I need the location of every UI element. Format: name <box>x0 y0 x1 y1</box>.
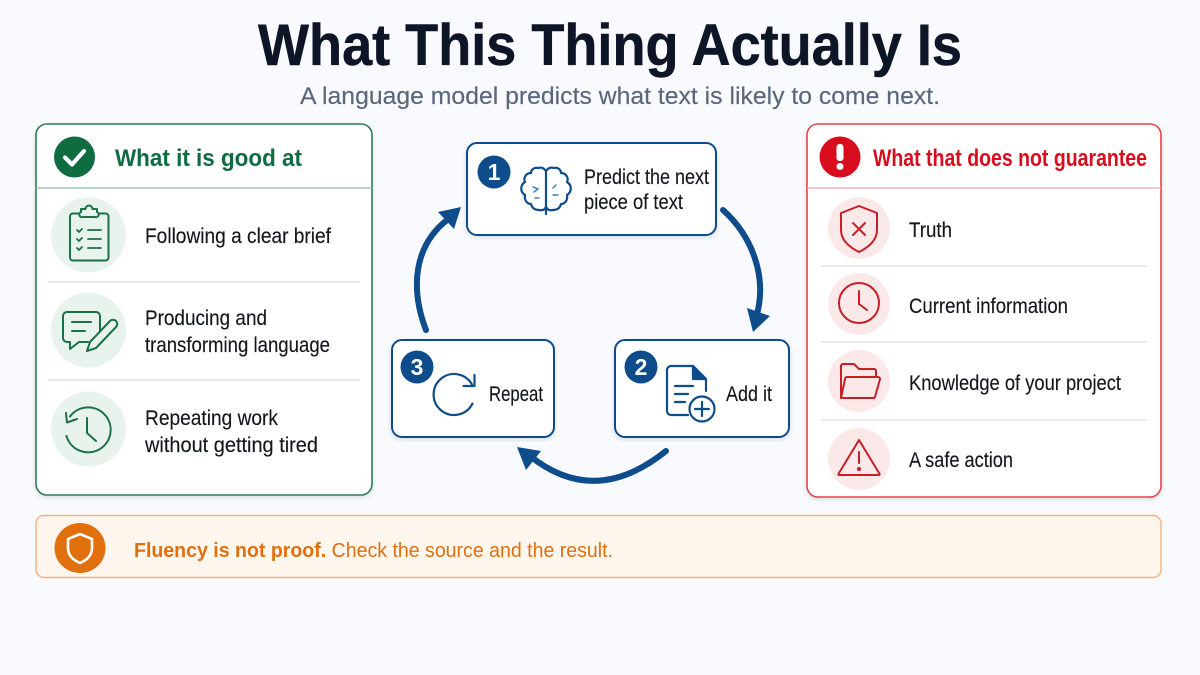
icon: brain <box>521 168 571 214</box>
callout: fluency is not proof <box>36 516 1161 578</box>
badge 1: 1 <box>488 159 501 185</box>
step 3: repeat <box>392 340 554 437</box>
row: repeating work without getting tired: Repeating work <box>145 407 278 430</box>
step 3: repeat: Repeat <box>489 383 543 406</box>
icon: shield with x <box>841 206 877 252</box>
row: current information <box>828 273 1068 335</box>
icon: document plus <box>667 366 714 422</box>
icon: alert badge <box>820 136 860 178</box>
arrow: step 1 to step 2 <box>723 210 770 332</box>
panel: what that does not guarantee <box>807 124 1161 497</box>
row: producing and transforming language: transforming language <box>145 334 330 357</box>
row: a safe action <box>828 428 1013 490</box>
icon: orange shield <box>54 523 106 573</box>
panel: what it is good at <box>36 124 372 495</box>
badge 3: 3 <box>411 354 423 380</box>
row: repeating work without getting tired: without getting tired <box>144 434 318 457</box>
row: a safe action: A safe action <box>909 449 1013 472</box>
subtitle: A language model predicts what text is likely to come next. <box>300 83 940 110</box>
arrow: step 2 to step 3 <box>517 447 666 481</box>
heading: what it is good at: What it is good at <box>115 145 302 172</box>
row: following a clear brief <box>51 198 331 272</box>
row: producing and transforming language: Producing and <box>145 307 267 330</box>
panel: prediction loop <box>392 143 789 481</box>
icon: warning triangle <box>838 440 880 475</box>
badge 1 <box>478 156 510 188</box>
callout text: Fluency is not proof. Check the source and the result. <box>134 539 613 562</box>
row: following a clear brief: Following a clear brief <box>145 225 331 248</box>
row: knowledge of your project <box>828 350 1121 412</box>
title: What This Thing Actually Is <box>258 13 962 78</box>
row: knowledge of your project: Knowledge of your project <box>909 372 1121 395</box>
icon: folder <box>841 364 880 398</box>
badge 2: 2 <box>635 354 647 380</box>
icon: repeat arrow <box>434 374 474 415</box>
badge 2 <box>624 350 658 384</box>
icon: check badge <box>54 136 95 178</box>
step 1: predict the next piece of text <box>467 143 716 235</box>
row: repeating work without getting tired <box>51 392 318 466</box>
icon: history clock <box>66 407 111 452</box>
icon: checklist clipboard <box>70 206 108 260</box>
step 1: predict the next piece of text: Predict the next <box>584 166 709 189</box>
step 2: add it <box>615 340 789 437</box>
arrow: step 3 to step 1 <box>417 207 461 330</box>
step 2: add it: Add it <box>726 383 772 406</box>
badge 3 <box>400 350 434 384</box>
icon: speech bubble and pencil <box>63 312 117 351</box>
row: producing and transforming language <box>51 292 330 368</box>
row: truth <box>828 197 952 259</box>
step 1: predict the next piece of text: piece of text <box>584 191 683 214</box>
row: current information: Current information <box>909 295 1068 318</box>
icon: clock <box>839 283 879 323</box>
row: truth: Truth <box>909 219 952 242</box>
